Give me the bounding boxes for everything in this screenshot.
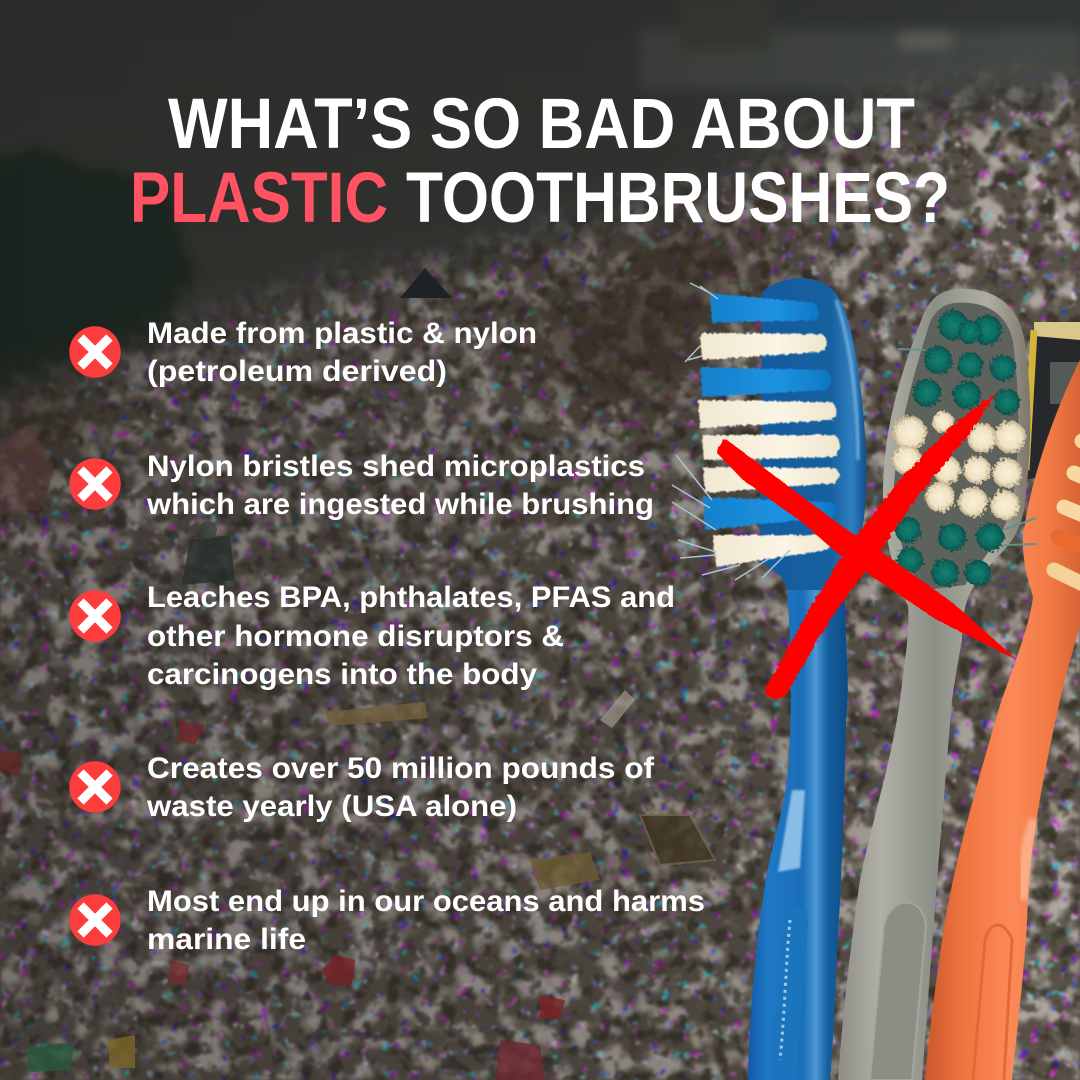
icon: red x xyxy=(69,894,121,946)
icon: orange toothbrush xyxy=(925,360,1080,1080)
bristles xyxy=(1054,441,1080,590)
cream bristles xyxy=(892,411,1026,520)
text: item 5: Most end up in our oceans and harms xyxy=(147,885,705,918)
icon: red x xyxy=(69,590,121,642)
text: item 1: Made from plastic & nylon xyxy=(147,317,537,350)
dark tree line xyxy=(0,150,190,400)
title line 2: plastic: PLASTIC xyxy=(130,159,388,238)
list: item 1 xyxy=(69,317,537,388)
text: item 2: Nylon bristles shed microplastics xyxy=(147,450,645,483)
title line 2: toothbrushes: TOOTHBRUSHES? xyxy=(406,159,950,238)
text: item 2 xyxy=(146,450,654,521)
text: item 2: which are ingested while brushing xyxy=(146,488,654,521)
text: item 3 xyxy=(147,581,675,691)
title line 1: WHAT’S SO BAD ABOUT xyxy=(168,85,915,164)
darker brown mound patches xyxy=(0,220,770,460)
list: item 4 xyxy=(69,752,655,823)
icon: blue toothbrush xyxy=(672,278,866,1080)
text: item 4: waste yearly (USA alone) xyxy=(146,790,517,823)
text: item 4 xyxy=(146,752,655,823)
teal bristles xyxy=(895,310,1020,587)
icon: red x xyxy=(69,761,121,813)
distant haze and structures xyxy=(640,0,1080,90)
text: item 5 xyxy=(147,885,705,956)
text: item 1 xyxy=(147,317,537,388)
text: item 3: Leaches BPA, phthalates, PFAS and xyxy=(147,581,675,614)
list: item 2 xyxy=(69,450,654,521)
text: item 3: carcinogens into the body xyxy=(147,658,537,691)
blue and white bristle rows xyxy=(698,293,840,567)
debris details xyxy=(0,268,715,1080)
icon: red x xyxy=(69,326,121,378)
icon: yellow machine behind brushes xyxy=(1024,322,1080,480)
list: item 3 xyxy=(69,581,675,691)
icon: grey toothbrush xyxy=(838,289,1037,1080)
list: item 5 xyxy=(69,885,705,956)
text: item 5: marine life xyxy=(147,923,306,956)
red x mark over toothbrushes xyxy=(717,392,1017,699)
text: item 1: (petroleum derived) xyxy=(147,355,447,388)
icon: red x xyxy=(69,458,121,510)
title xyxy=(130,85,950,238)
text: item 4: Creates over 50 million pounds of xyxy=(147,752,655,785)
text: item 3: other hormone disruptors & xyxy=(147,620,564,653)
stray bristles xyxy=(672,283,790,580)
